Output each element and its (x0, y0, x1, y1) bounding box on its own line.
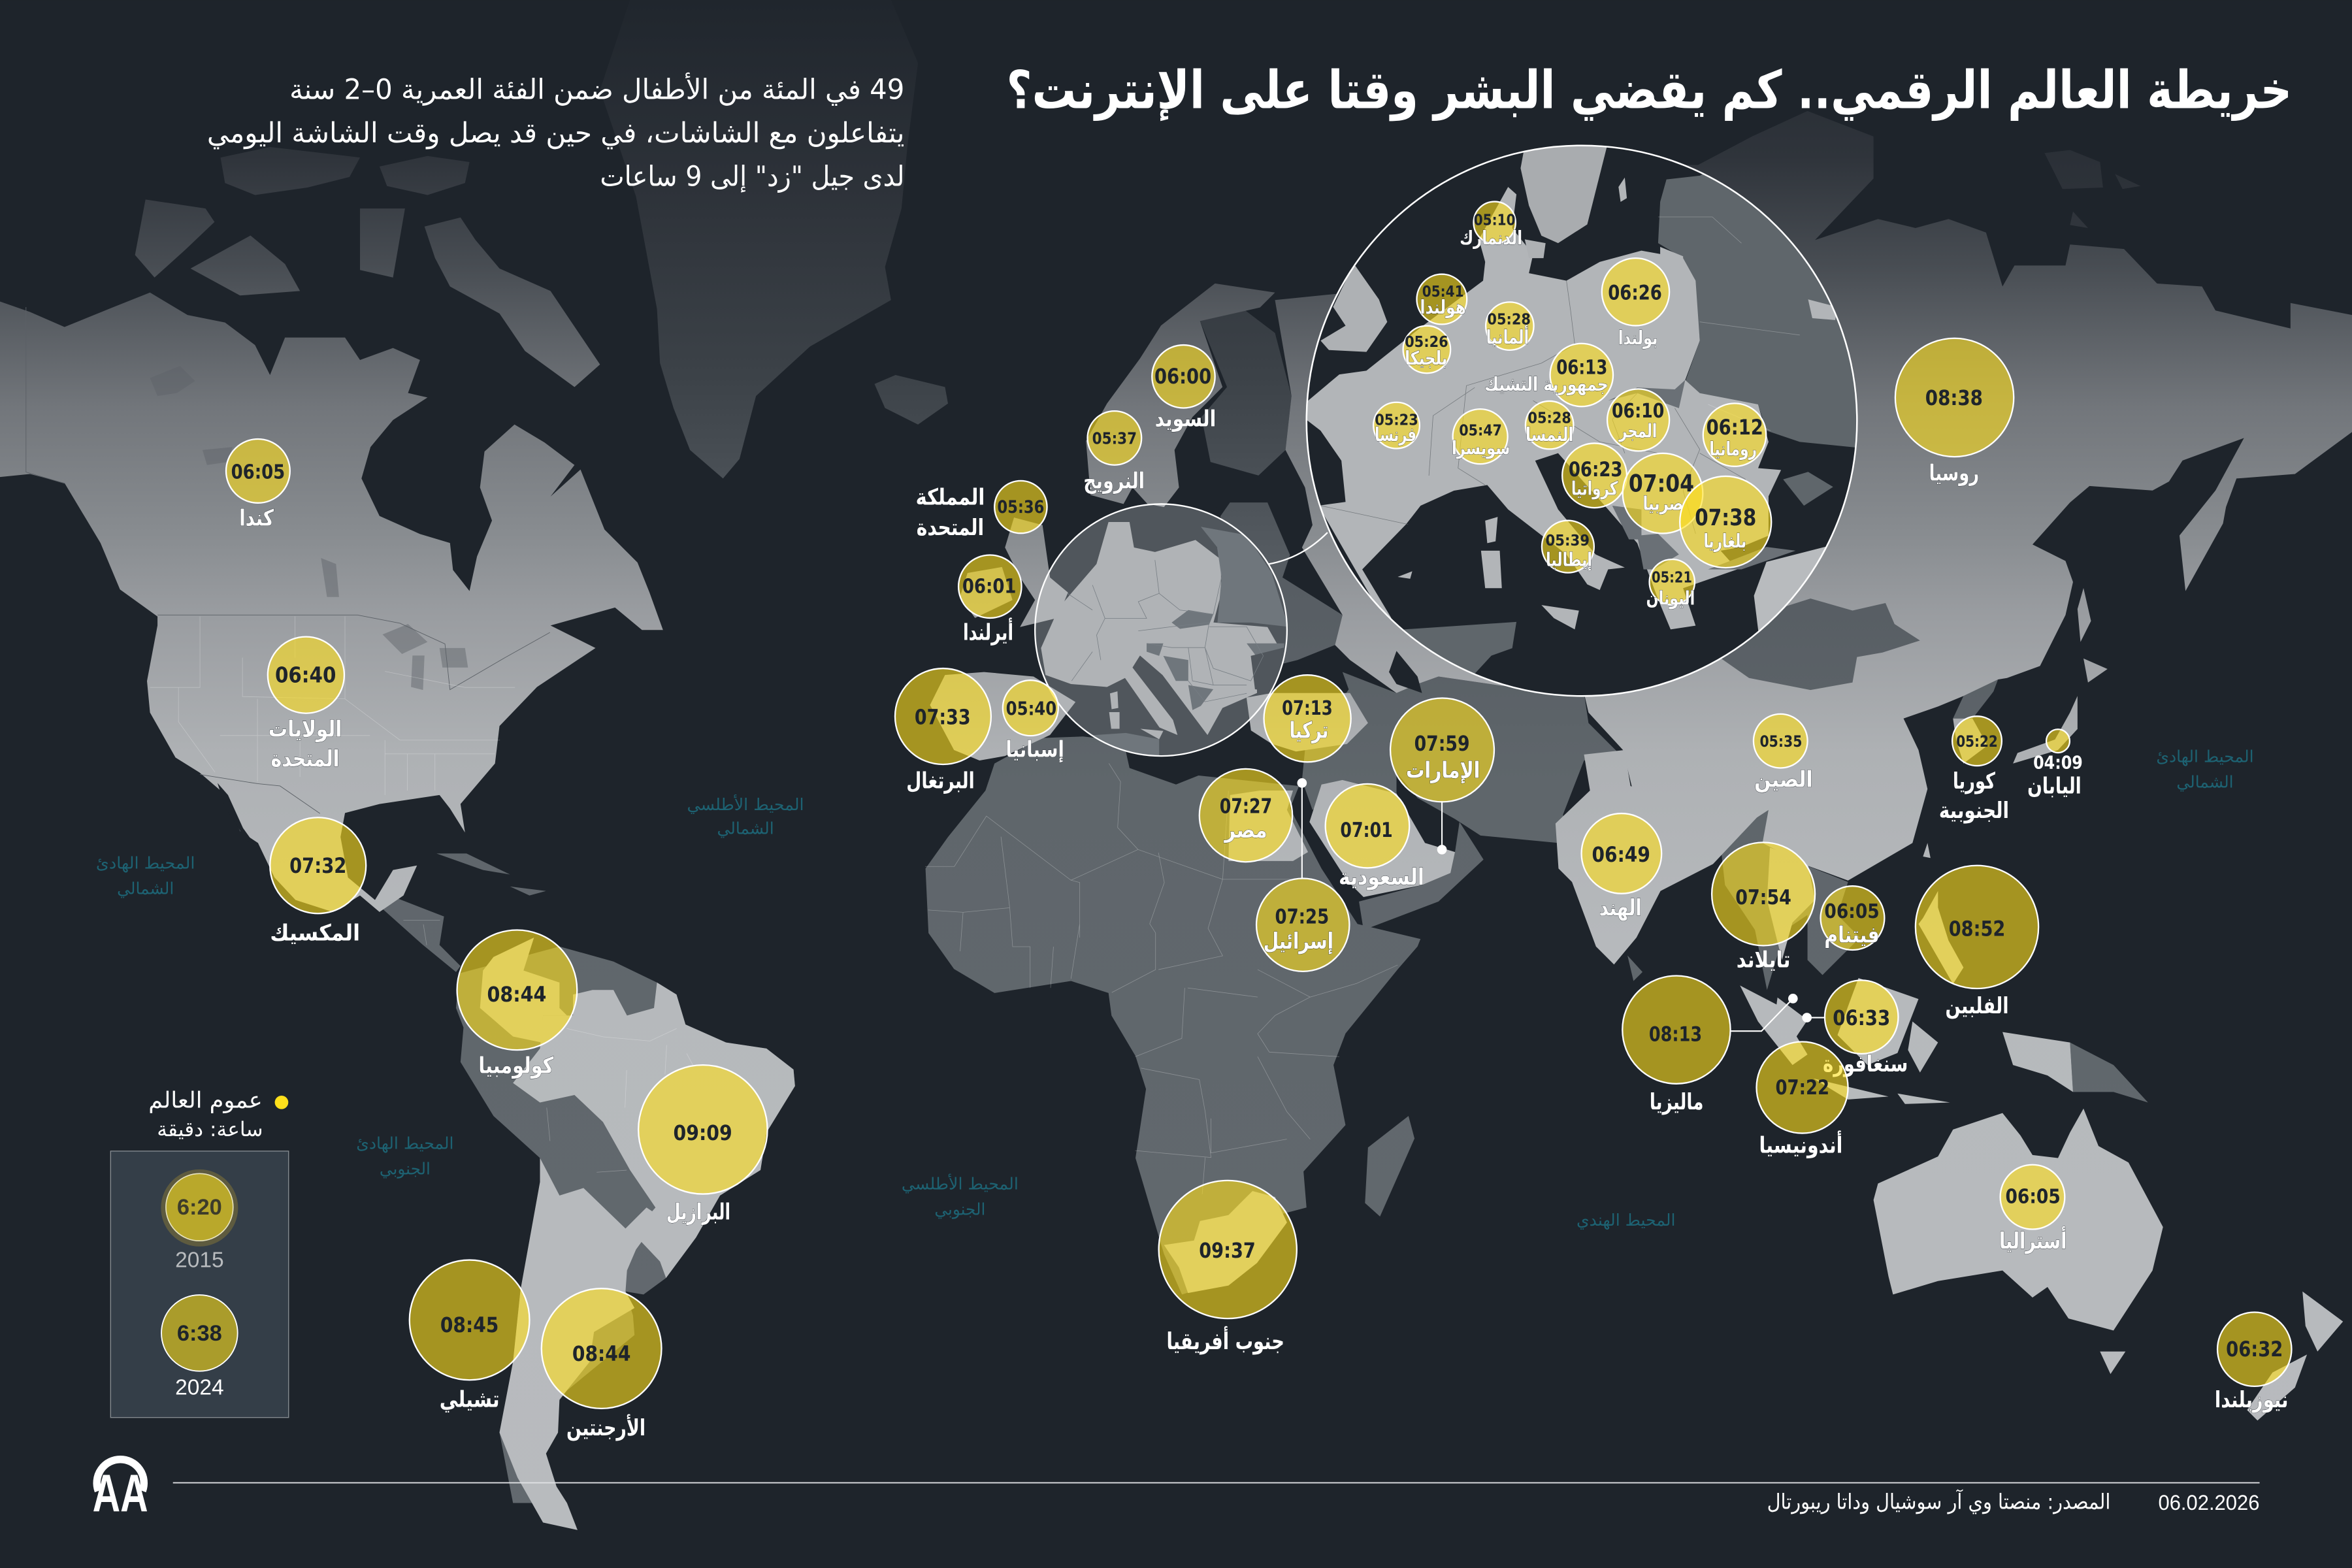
bubble: australia: 06:05 (2006, 1185, 2061, 1208)
bubble: denmark (1460, 202, 1522, 249)
bubble: norway: 05:37 (1092, 429, 1137, 448)
bubble: italy: 05:39 (1545, 532, 1590, 549)
bubble: uae: الإمارات (1406, 757, 1480, 783)
bubble: japan: اليابان (2027, 774, 2082, 800)
legend: panel (110, 1151, 289, 1418)
bubble: israel: إسرائيل (1264, 928, 1333, 955)
ocean: north atlantic (687, 794, 804, 838)
bubble: united states: المتحدة (271, 746, 339, 772)
bubble: belgium: بلجيكا (1405, 347, 1447, 369)
bubble: france: 05:23 (1375, 412, 1418, 429)
bubble: uae (1390, 698, 1494, 802)
legend (110, 1088, 289, 1418)
bubble: vietnam (1821, 886, 1884, 950)
map: overlays in grey and sea (1719, 598, 1920, 690)
bubble: netherlands (1416, 274, 1467, 324)
bubble: switzerland (1452, 409, 1510, 464)
bubble: israel (1256, 878, 1349, 972)
bubble: switzerland: 05:47 (1459, 423, 1502, 440)
bubble: spain (1003, 680, 1064, 762)
bubble: united states: 06:40 (275, 662, 336, 688)
ocean: north pacific west: المحيط الهادئ (96, 853, 195, 873)
bubble: south korea: 05:22 (1956, 732, 1998, 751)
bubble: indonesia: 07:22 (1775, 1076, 1829, 1100)
bubble: singapore (1823, 980, 1908, 1077)
bubble: greece (1646, 559, 1695, 609)
connector lines and dots (1298, 778, 1825, 1031)
bubble: south africa: جنوب أفريقيا (1167, 1326, 1284, 1355)
legend: 2024 bubble: 6:38 (177, 1321, 222, 1346)
map: lakes (150, 366, 468, 690)
bubble: norway (1083, 411, 1145, 494)
connector arc between lenses (1269, 532, 1328, 564)
bubble: japan (2027, 729, 2083, 800)
bubble: serbia: 07:04 (1629, 470, 1694, 498)
bubble: chile: تشيلي (440, 1387, 500, 1413)
bubble: united kingdom (916, 481, 1047, 541)
bubble: canada: كندا (239, 506, 274, 532)
bubble: ireland (958, 555, 1022, 646)
map: borders (26, 307, 550, 813)
bubble: south africa: 09:37 (1199, 1238, 1256, 1263)
lens: grey east europe (1658, 174, 1857, 448)
bubble: mexico: المكسيك (270, 921, 360, 947)
bubble: uae: 07:59 (1414, 731, 1470, 756)
footer: date: 06.02.2026 (2158, 1491, 2259, 1514)
ocean: south atlantic (902, 1173, 1019, 1220)
bubble: saudi arabia: السعودية (1339, 864, 1424, 890)
legend: unit label: ساعة: دقيقة (157, 1118, 263, 1141)
bubble: china: الصين (1754, 767, 1813, 793)
bubble: russia (1895, 338, 2014, 486)
bubble: philippines (1916, 866, 2038, 1019)
bubble: united kingdom: 05:36 (997, 497, 1044, 517)
bubble: new zealand: 06:32 (2226, 1337, 2283, 1362)
bubble: serbia: صربيا (1642, 493, 1683, 515)
lens: light land (1306, 187, 1781, 629)
bubble: netherlands: 05:41 (1422, 284, 1464, 301)
bubble: south korea: كوريا (1953, 768, 1996, 794)
ocean: north pacific east (2156, 747, 2254, 791)
bubble: ireland: 06:01 (962, 576, 1016, 598)
bubble: germany: ألمانيا (1486, 325, 1529, 348)
subtitle text block: 49 في المئة من الأطفال ضمن الفئة العمرية 0–2 سنة (289, 73, 904, 106)
bubble: greece: اليونان (1646, 587, 1695, 609)
bubble: hungary (1607, 389, 1669, 451)
ocean: north pacific east: المحيط الهادئ (2156, 747, 2254, 766)
bubble: south korea (1939, 716, 2009, 824)
bubble: italy (1542, 521, 1594, 573)
bubble: spain: 05:40 (1006, 698, 1056, 720)
bubble: romania: 06:12 (1707, 415, 1763, 440)
bubble: austria: النمسا (1526, 423, 1573, 446)
bubble: mexico: 07:32 (289, 853, 346, 878)
bubble: united kingdom: المملكة (916, 485, 985, 511)
bubble: canada (226, 439, 290, 532)
bubble: brazil: البرازيل (666, 1200, 730, 1226)
bubble: romania (1703, 403, 1766, 466)
bubble: thailand: 07:54 (1735, 886, 1791, 909)
bubble: belgium (1403, 326, 1450, 373)
bubble: portugal (895, 668, 991, 794)
bubble: united states: الولايات (269, 716, 342, 742)
bubble: argentina: 08:44 (572, 1341, 630, 1366)
subtitle text block (207, 73, 904, 193)
ocean: indian: المحيط الهندي (1576, 1211, 1676, 1230)
bubble: malaysia: ماليزيا (1650, 1089, 1703, 1115)
bubble: south africa (1159, 1181, 1297, 1355)
bubble: colombia: كولومبيا (478, 1053, 554, 1079)
bubbles: world (226, 338, 2291, 1441)
bubble: hungary: 06:10 (1612, 400, 1664, 423)
bubble: vietnam: 06:05 (1824, 900, 1880, 923)
logo: AA (93, 1460, 148, 1523)
bubble: united kingdom: المتحدة (917, 515, 984, 541)
bubble: sweden (1152, 345, 1216, 433)
bubbles: europe lens (1373, 202, 1771, 609)
bubble: united states (268, 637, 344, 772)
bubble: new zealand: نيوزيلندا (2215, 1387, 2288, 1413)
bubble: india: الهند (1599, 895, 1642, 921)
bubble: indonesia (1757, 1042, 1848, 1158)
ocean: south atlantic: المحيط الأطلسي (902, 1173, 1019, 1194)
ocean: north pacific west: الشمالي (117, 879, 174, 898)
bubble: singapore: 06:33 (1833, 1005, 1890, 1030)
bubble: russia: روسيا (1929, 460, 1979, 486)
bubble: argentina: الأرجنتين (566, 1414, 645, 1441)
footer: source: المصدر: منصتا وي آر سوشيال وداتا ريبورتال (1767, 1489, 2110, 1514)
bubble: croatia (1562, 443, 1627, 508)
ocean: north pacific west (96, 853, 195, 898)
bubble: japan: 04:09 (2033, 753, 2083, 774)
bubble: spain: إسبانيا (1005, 736, 1064, 762)
bubble: austria: 05:28 (1527, 410, 1571, 427)
bubble: philippines: 08:52 (1949, 917, 2005, 941)
bubble: mexico (270, 817, 366, 947)
bubble: colombia (457, 930, 577, 1079)
ocean: north pacific east: الشمالي (2176, 772, 2234, 791)
bubble: egypt: 07:27 (1220, 794, 1272, 818)
bubble: czech republic: جمهورية التشيك (1484, 373, 1609, 395)
bubble: bulgaria: بلغاريا (1703, 530, 1746, 552)
bubble: malaysia (1622, 975, 1731, 1115)
bubble: new zealand (2215, 1312, 2291, 1413)
bubble: croatia: 06:23 (1569, 458, 1622, 482)
bubble: sweden: 06:00 (1154, 364, 1211, 389)
bubble: brazil (638, 1065, 768, 1226)
bubble: saudi arabia: 07:01 (1340, 819, 1393, 842)
bubble: germany (1486, 302, 1534, 350)
bubble: romania: رومانيا (1709, 438, 1757, 460)
connector: uae (1437, 801, 1446, 855)
bubble: vietnam: فيتنام (1824, 923, 1880, 949)
bubble: sweden: السويد (1155, 406, 1216, 433)
bubble: germany: 05:28 (1487, 312, 1531, 329)
bubble: indonesia: أندونيسيا (1759, 1130, 1842, 1158)
legend: 2015 bubble: 6:20 (177, 1195, 222, 1220)
subtitle text block: لدى جيل "زد" إلى 9 ساعات (600, 161, 904, 193)
legend: 2015 year: 2015 (175, 1248, 224, 1272)
bubble: portugal: 07:33 (915, 704, 971, 729)
connector: singapore (1802, 1013, 1825, 1022)
legend: 2024 year: 2024 (175, 1376, 224, 1400)
lens: borders (1320, 281, 1746, 534)
bubble: france: فرنسا (1375, 423, 1416, 446)
bubble: south korea: الجنوبية (1939, 798, 2009, 824)
bubble: greece: 05:21 (1652, 570, 1692, 587)
bubble: india: 06:49 (1592, 842, 1650, 867)
bubble: israel: 07:25 (1275, 906, 1329, 929)
legend: world average dot (275, 1096, 288, 1109)
bubble: austria (1526, 401, 1573, 449)
small europe locator lens (1034, 503, 1288, 757)
bubble: ireland: أيرلندا (963, 617, 1013, 646)
connector: israel (1298, 778, 1307, 879)
bubble: russia: 08:38 (1925, 385, 1983, 410)
bubble: argentina (542, 1288, 661, 1441)
ocean: south atlantic: الجنوبي (934, 1200, 985, 1220)
bubble: egypt (1200, 769, 1292, 862)
bubble: france (1373, 402, 1420, 448)
bubble: poland (1602, 258, 1669, 349)
map: grey countries (381, 0, 2148, 1503)
ocean: north atlantic: المحيط الأطلسي (687, 794, 804, 814)
bubble: brazil: 09:09 (674, 1120, 732, 1145)
ocean: north atlantic: الشمالي (717, 819, 774, 838)
bubble: hungary: المجر (1618, 419, 1657, 442)
bubble: chile: 08:45 (440, 1313, 498, 1337)
bubble: chile (410, 1260, 529, 1413)
bubble: turkey: تركيا (1290, 718, 1328, 744)
ocean: south pacific: المحيط الهادئ (356, 1134, 454, 1154)
ocean: south pacific (356, 1134, 454, 1179)
connector: malaysia (1731, 994, 1798, 1031)
legend: 2024 bubble (161, 1295, 238, 1371)
bubble: netherlands: هولندا (1420, 296, 1466, 318)
bubble: italy: إيطاليا (1546, 548, 1592, 571)
big europe lens map (1305, 145, 1858, 697)
bubble: portugal: البرتغال (906, 768, 975, 794)
bubble: bulgaria (1680, 476, 1771, 568)
bubble: australia (1999, 1165, 2066, 1254)
bubble: china (1754, 714, 1813, 793)
bubble: norway: النرويج (1083, 468, 1145, 494)
bubble: china: 05:35 (1759, 732, 1802, 751)
bubble: colombia: 08:44 (487, 982, 546, 1007)
ocean: south pacific: الجنوبي (380, 1160, 431, 1179)
bubble: poland: بولندا (1618, 327, 1658, 349)
bubble: singapore: سنغافورة (1823, 1051, 1908, 1077)
bubble: poland: 06:26 (1608, 281, 1662, 304)
logo: AA: AA (93, 1464, 148, 1523)
ocean labels (96, 747, 2254, 1230)
bubble: australia: أستراليا (1999, 1226, 2066, 1254)
footer rule (173, 1482, 2260, 1484)
bubble: canada: 06:05 (231, 461, 285, 483)
bubble: switzerland: سويسرا (1452, 437, 1510, 459)
bubble: czech republic: 06:13 (1556, 356, 1607, 379)
bubble: india (1582, 813, 1661, 921)
bubble: czech republic (1484, 344, 1613, 406)
bubble: philippines: الفلبين (1945, 993, 2009, 1019)
bubble: turkey: 07:13 (1282, 697, 1333, 720)
lens: grey balkans, slovakia, north africa, crimea (1608, 380, 1685, 408)
bubble: thailand (1712, 842, 1815, 973)
legend: 2015 bubble (161, 1169, 238, 1247)
bubble: egypt: مصر (1224, 817, 1267, 843)
bubble: serbia (1623, 453, 1703, 533)
bubble: denmark: 05:10 (1474, 212, 1516, 229)
bubble: belgium: 05:26 (1405, 334, 1448, 351)
bubble: thailand: تايلاند (1737, 947, 1790, 973)
legend: world average label: عموم العالم (148, 1088, 263, 1114)
bubble: saudi arabia (1326, 784, 1424, 890)
bubble: denmark: الدنمارك (1460, 227, 1522, 249)
subtitle text block: يتفاعلون مع الشاشات، في حين قد يصل وقت الشاشة اليومي (207, 118, 904, 150)
bubble: bulgaria: 07:38 (1695, 505, 1756, 531)
bubble: malaysia: 08:13 (1649, 1022, 1702, 1046)
bubble: croatia: كرواتيا (1571, 478, 1618, 500)
bubble: turkey (1264, 675, 1351, 762)
